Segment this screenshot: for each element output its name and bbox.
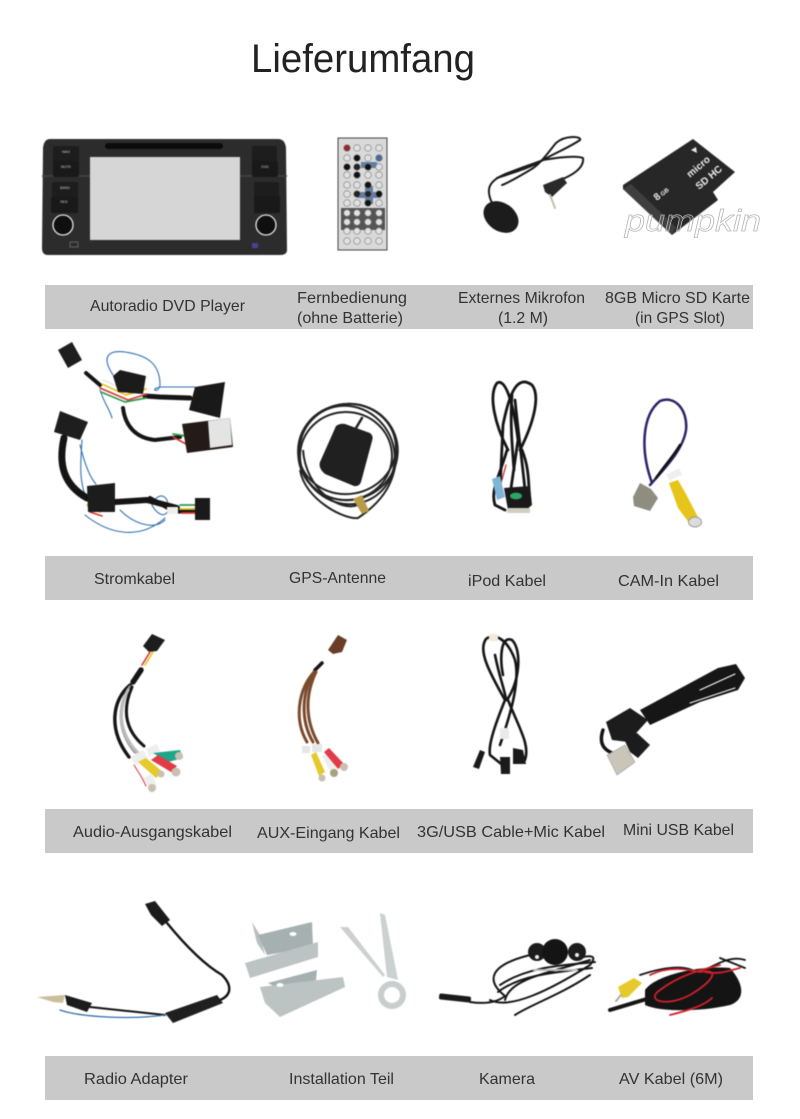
label: Installation Teil: Installation Teil <box>289 1071 394 1088</box>
icon: CAM-In cable <box>633 400 702 527</box>
icon: DVD head unit: MUTE <box>61 165 72 169</box>
label: 8GB Micro SD Karte <box>605 290 750 327</box>
label: Radio Adapter: Radio Adapter <box>84 1071 189 1088</box>
label: 3G/USB Cable+Mic Kabel: 3G/USB Cable+Mic Kabel <box>417 824 605 841</box>
row 1 caption bar <box>45 285 753 329</box>
label: Autoradio DVD Player: Autoradio DVD Player <box>90 298 246 315</box>
icon: AUX input cable <box>299 635 348 782</box>
icon: DVD head unit <box>42 139 287 255</box>
icon: micro SD card: SD HC <box>694 164 725 192</box>
label: Fernbedienung <box>297 290 407 327</box>
row 2 caption bar <box>45 556 753 600</box>
icon: radio adapter <box>37 901 229 1023</box>
label: Externes Mikrofon: (1.2 M) <box>498 310 548 327</box>
label: 8GB Micro SD Karte: 8GB Micro SD Karte <box>605 290 750 307</box>
icon: micro SD card <box>623 139 735 235</box>
icon: external microphone <box>477 137 583 239</box>
label: 8GB Micro SD Karte: (in GPS Slot) <box>635 310 725 327</box>
icon: installation brackets and release tool <box>245 913 403 1017</box>
icon: DVD head unit: DVD <box>261 165 269 169</box>
icon: power harness <box>54 342 233 532</box>
row 3 caption bar <box>45 809 753 853</box>
row 4 caption bar <box>45 1056 753 1100</box>
icon: DVD head unit: RES <box>60 200 68 204</box>
icon: AV cable <box>610 958 745 1015</box>
icon: iPod cable <box>492 382 536 513</box>
title: Lieferumfang <box>251 37 475 81</box>
label: Fernbedienung: Fernbedienung <box>297 290 407 307</box>
icon: GPS antenna <box>281 388 413 522</box>
label: Stromkabel: Stromkabel <box>94 571 175 588</box>
icon: remote control <box>338 138 387 250</box>
label: Mini USB Kabel: Mini USB Kabel <box>623 822 734 839</box>
label: Kamera: Kamera <box>479 1071 535 1088</box>
label: GPS-Antenne: GPS-Antenne <box>289 570 386 587</box>
icon: DVD head unit: NAVI <box>62 150 70 154</box>
icon: micro SD card: micro <box>685 154 713 180</box>
icon: mini USB cable <box>601 664 745 775</box>
label: iPod Kabel: iPod Kabel <box>468 573 546 590</box>
label: Externes Mikrofon <box>458 290 585 327</box>
label: Audio-Ausgangskabel: Audio-Ausgangskabel <box>73 824 232 841</box>
icon: 3G USB mic cable <box>473 634 526 774</box>
icon: micro SD card: 8 GB <box>652 184 672 203</box>
label: AUX-Eingang Kabel: AUX-Eingang Kabel <box>257 825 400 842</box>
icon: DVD head unit: BAND <box>60 186 70 190</box>
label: Fernbedienung: (ohne Batterie) <box>297 310 403 327</box>
icon: rear view camera <box>439 939 595 1015</box>
icon: audio output cable <box>115 634 183 792</box>
label: CAM-In Kabel: CAM-In Kabel <box>618 573 719 590</box>
watermark: pumpkin logo: pumpkin <box>624 203 761 238</box>
label: AV Kabel (6M): AV Kabel (6M) <box>619 1071 723 1088</box>
label: Externes Mikrofon: Externes Mikrofon <box>458 290 585 307</box>
